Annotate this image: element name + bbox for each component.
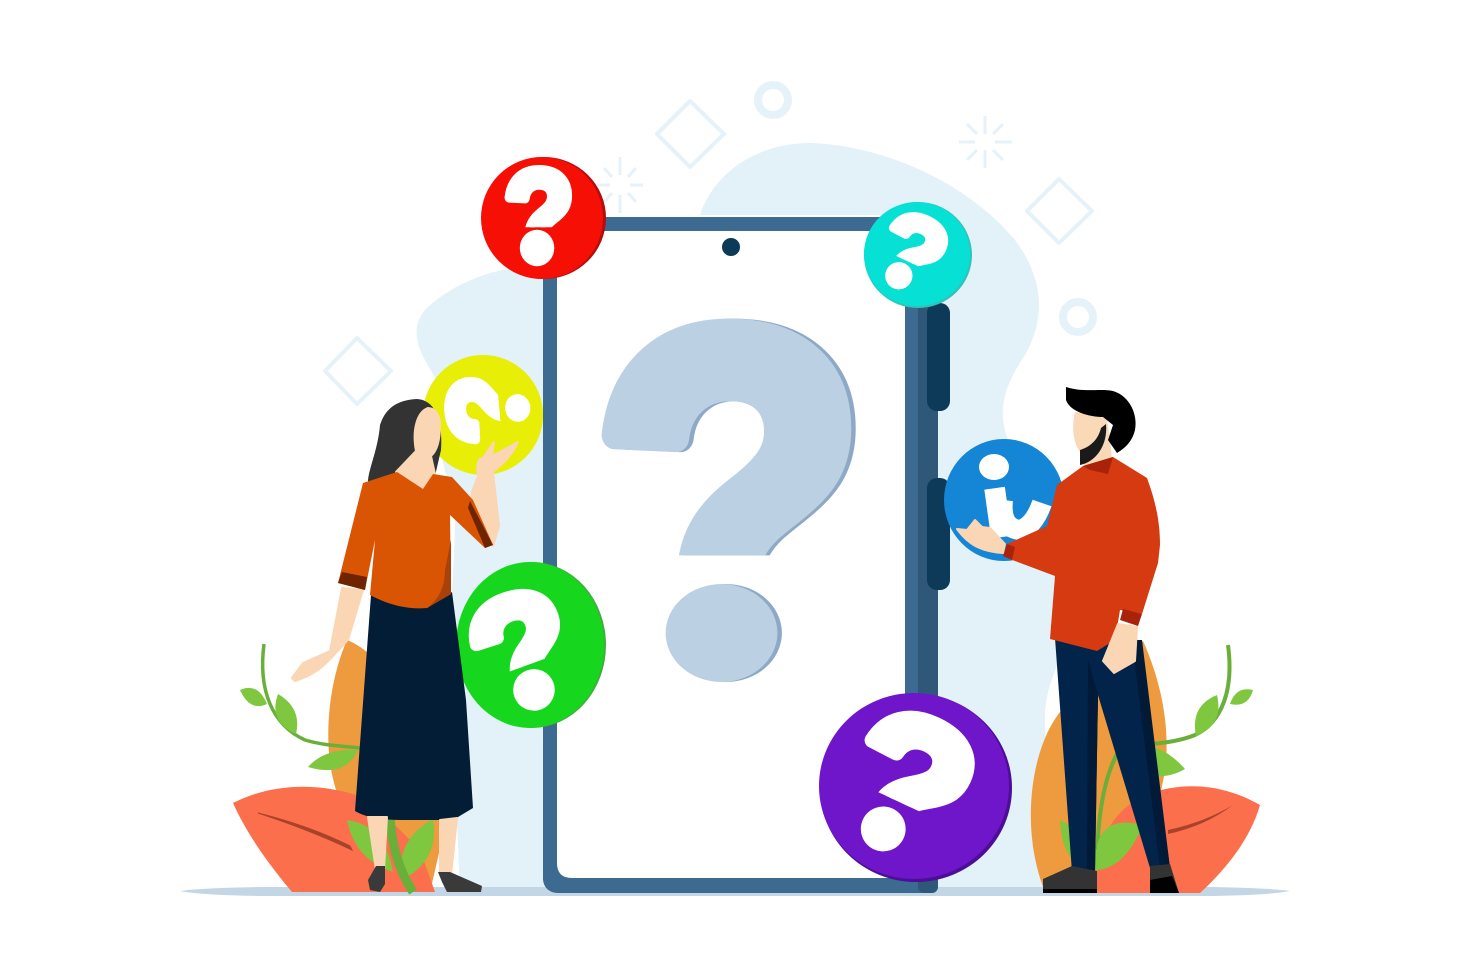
decorative shapes bbox=[325, 85, 1093, 404]
large question mark shadow: ? bbox=[599, 234, 868, 775]
orange leaf bbox=[328, 640, 442, 892]
red leaf bbox=[1097, 786, 1260, 893]
shirt bbox=[1003, 457, 1160, 651]
shirt cuffs bbox=[1003, 544, 1142, 626]
left plant bbox=[233, 640, 442, 892]
woman bbox=[292, 399, 518, 892]
blouse bbox=[338, 472, 493, 608]
icon: red question badge: ? bbox=[504, 144, 574, 290]
hair bbox=[368, 399, 441, 482]
man bbox=[957, 387, 1179, 893]
vine bbox=[263, 644, 360, 748]
shoes bbox=[368, 866, 482, 892]
icon: purple question badge: ? bbox=[806, 663, 1006, 911]
green leaves bbox=[1060, 689, 1253, 870]
icon: teal question badge: ? bbox=[857, 187, 965, 320]
legs bbox=[368, 817, 457, 875]
skirt bbox=[355, 592, 473, 820]
phone body bbox=[543, 217, 938, 893]
large question mark bbox=[602, 318, 852, 682]
face and neck bbox=[1073, 412, 1113, 470]
trousers bbox=[1055, 638, 1170, 872]
icon: red question badge bbox=[481, 157, 606, 279]
green leaves bbox=[240, 688, 434, 880]
beard bbox=[1080, 424, 1106, 465]
orange leaf bbox=[1031, 641, 1167, 892]
vine bbox=[1097, 645, 1230, 870]
icon: yellow question badge: ? bbox=[423, 368, 557, 449]
illustration bbox=[180, 81, 1290, 896]
hair bbox=[1066, 387, 1136, 453]
icon: blue info badge: i bbox=[973, 439, 1019, 559]
background blobs bbox=[417, 143, 1070, 890]
phone screen bbox=[557, 231, 905, 878]
icon: yellow question badge bbox=[424, 355, 543, 475]
camera bbox=[722, 238, 740, 256]
hands bbox=[957, 520, 1137, 673]
red leaf bbox=[233, 787, 435, 892]
large question mark shadow bbox=[625, 318, 856, 682]
ground bbox=[180, 887, 1290, 896]
skin: arms and hand bbox=[292, 588, 363, 681]
skin: neck and face bbox=[396, 408, 440, 490]
smartphone bbox=[543, 217, 950, 893]
large question mark: ? bbox=[595, 234, 863, 775]
icon: purple question badge bbox=[819, 693, 1012, 882]
cuffs bbox=[338, 501, 493, 590]
shoes bbox=[1043, 864, 1179, 893]
icon: green question badge: ? bbox=[446, 551, 600, 753]
phone side buttons bbox=[927, 303, 950, 590]
right plant bbox=[1031, 641, 1260, 893]
icon: blue info badge bbox=[944, 439, 1064, 561]
